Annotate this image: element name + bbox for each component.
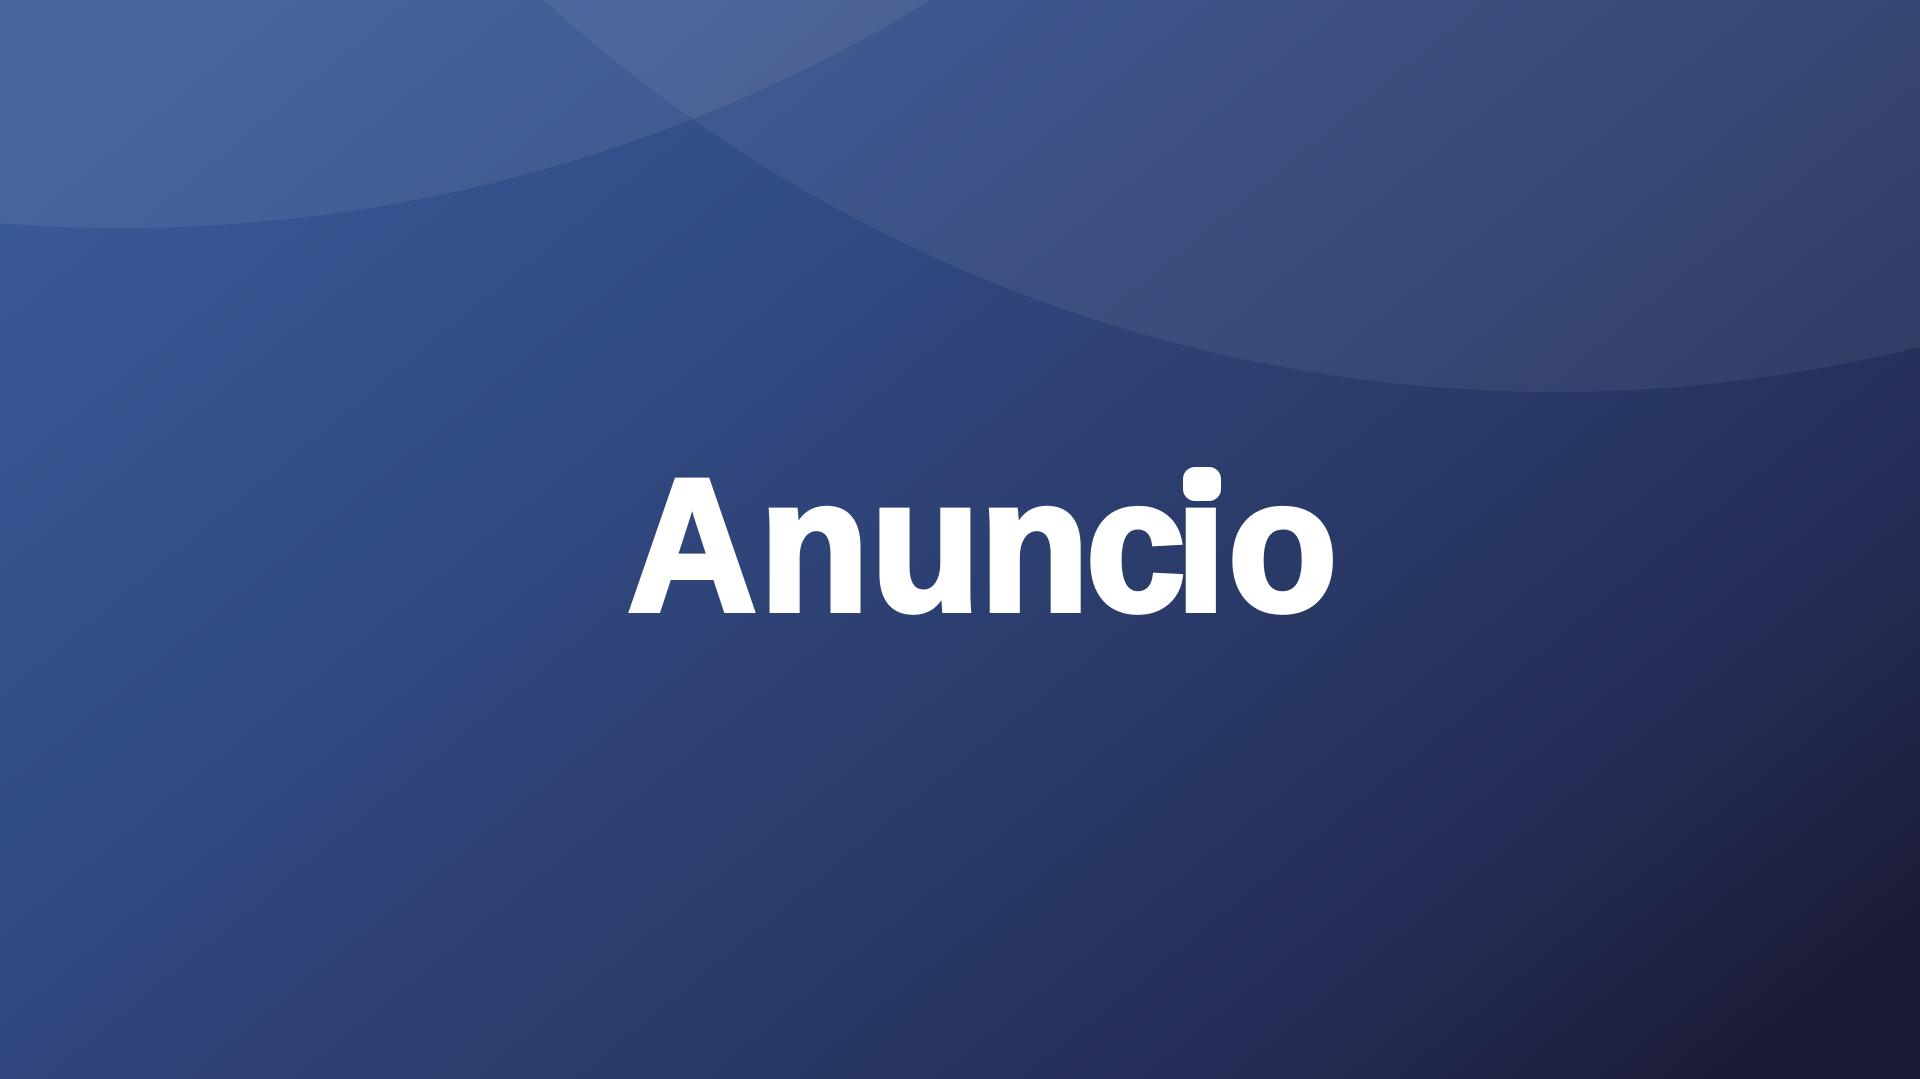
title: Anuncio [628, 440, 1337, 650]
decorative circle: top right [55, 0, 1920, 392]
decorative circle: top left [0, 0, 1671, 228]
